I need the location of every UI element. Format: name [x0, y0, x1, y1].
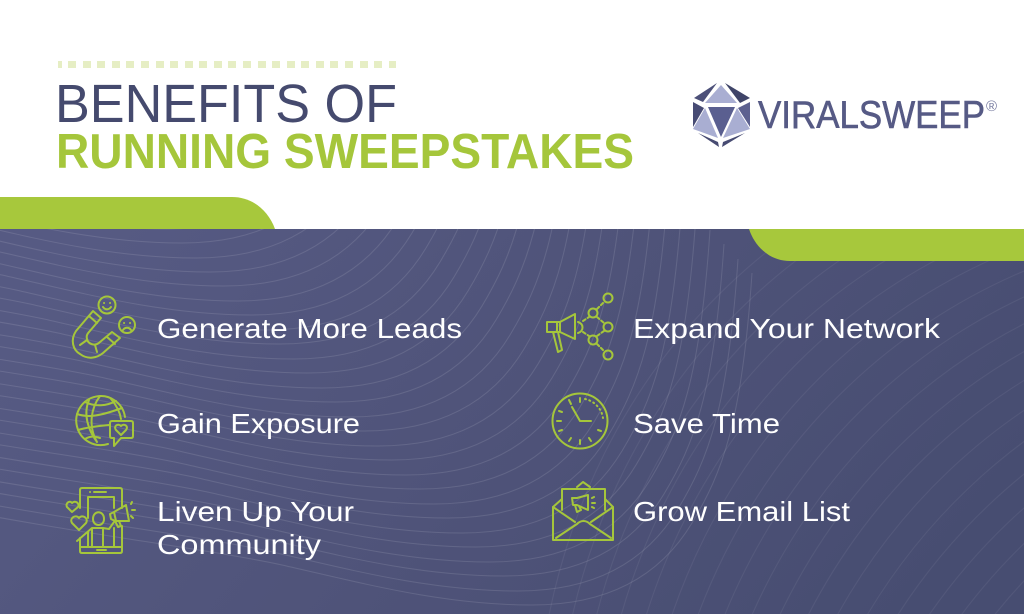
registered mark: ® [986, 98, 997, 115]
title: BENEFITS OF [55, 74, 397, 134]
item: generate more leads [73, 296, 462, 358]
icon: phone with person and megaphone [67, 488, 135, 553]
label: Gain Exposure [157, 408, 360, 439]
label: Save Time [633, 408, 780, 439]
logo: ViralSweep [693, 83, 997, 147]
dark background panel [0, 229, 1024, 614]
label: Expand Your Network [633, 313, 941, 344]
item: liven up your community [67, 488, 354, 560]
label: Liven Up Your [157, 496, 354, 527]
icon: megaphone network [547, 294, 612, 360]
dotted rule [58, 61, 396, 68]
item: save time [552, 394, 780, 448]
label: Community [157, 529, 321, 560]
item: grow email list [553, 482, 850, 540]
icon: clock [552, 394, 608, 448]
title [55, 74, 634, 179]
icon: envelope with megaphone [553, 482, 613, 540]
title: RUNNING SWEEPSTAKES [56, 125, 634, 179]
label: Grow Email List [633, 496, 850, 527]
icon: magnet [73, 296, 135, 358]
icon: globe with heart bubble [76, 396, 133, 446]
item: expand your network [547, 294, 941, 360]
label: Generate More Leads [157, 313, 462, 344]
logo gem icon [693, 83, 750, 147]
label [157, 496, 354, 560]
item: gain exposure [76, 396, 360, 446]
green tab left [0, 197, 275, 229]
green tab right [749, 229, 1024, 261]
logo wordmark: VIRALSWEEP [758, 94, 985, 137]
